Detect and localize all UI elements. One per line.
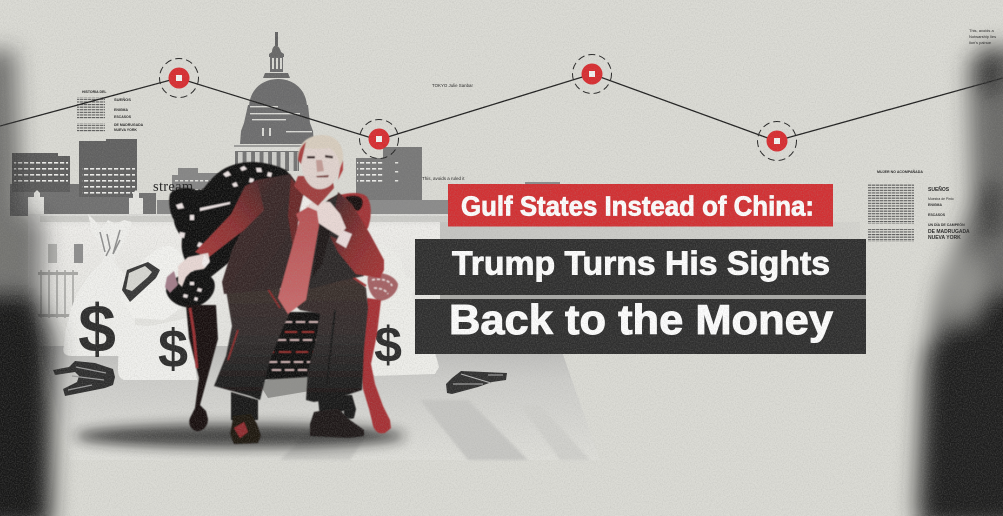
newspaper text column right: UN DÍA DE CAMPEÓN (928, 222, 965, 227)
newspaper text column right: ENIGMA (928, 203, 942, 207)
small caption top right: This, avoids a (969, 28, 994, 33)
title block (415, 184, 866, 354)
right sock and shoe (318, 392, 346, 418)
head (299, 138, 342, 189)
right cuff (336, 230, 352, 248)
left sock and shoe (231, 392, 258, 420)
armchair (166, 162, 398, 433)
dark headline bar one (415, 239, 866, 295)
newspaper text column right (868, 169, 970, 242)
newspaper text column right: ESCASOS (928, 213, 946, 217)
money bag bottom (118, 318, 197, 380)
skyline: city buildings (10, 139, 593, 216)
red headline bar (448, 184, 833, 226)
hair (298, 135, 343, 167)
tie (278, 207, 319, 314)
chair back leg (342, 395, 356, 419)
money bag with cash top (120, 246, 184, 320)
money bag bottom: $ (158, 319, 188, 379)
money bag right (359, 243, 439, 376)
chair apron (258, 312, 324, 380)
white house facade band (28, 190, 866, 346)
chart marker 1 (160, 58, 198, 98)
chart marker 4 (758, 122, 796, 160)
newspaper text column right: NUEVA YORK (928, 235, 961, 241)
newspaper text column left: SUEÑOS (114, 97, 131, 102)
right sleeve (330, 192, 384, 278)
jacket right side (296, 194, 364, 290)
lapel (288, 178, 304, 254)
eyes brows nose mouth (307, 155, 333, 158)
neck (294, 176, 334, 206)
Donald Trump figure (165, 135, 384, 444)
newspaper text column right: SUEÑOS (928, 186, 950, 193)
chair right wing (328, 193, 371, 234)
newspaper text column left: HISTORIA DEL (82, 90, 107, 94)
right trouser (280, 274, 368, 402)
left trouser (214, 278, 290, 400)
small caption top right (969, 28, 996, 45)
left hand (178, 253, 210, 287)
chart line (0, 74, 1003, 141)
floor with shadow (40, 346, 600, 460)
newspaper text column left: NUEVA YORK (114, 128, 137, 132)
cash pile right (446, 371, 507, 394)
dark headline bar one: Trump Turns His Sights (452, 244, 830, 282)
chair right leg (359, 298, 391, 433)
blurred foreground figure left (0, 50, 58, 516)
newspaper text column left: ENIGMA (114, 108, 128, 112)
small caption top right: Notwarship lies (969, 34, 996, 39)
newspaper text column left (77, 90, 144, 132)
small word: stream: stream (153, 179, 194, 195)
blurred foreground figure right (915, 40, 1003, 516)
chair left leg (186, 305, 218, 431)
newspaper text column left: ESCASOS (114, 115, 132, 119)
shirt (289, 186, 320, 286)
money bag left: $ (78, 291, 116, 367)
chair right arm scroll (368, 273, 398, 301)
newspaper text column right: MUJER NO ACOMPAÑADA (877, 169, 923, 174)
US Capitol dome (234, 32, 314, 171)
money bag left (63, 214, 136, 367)
dark headline bar two: Back to the Money (449, 296, 834, 343)
dark headline bar two (415, 296, 866, 354)
newspaper text column right: Muestra de Pinto (928, 197, 954, 201)
cash pile left (53, 361, 115, 396)
seat rail (264, 322, 320, 370)
right hand (306, 201, 346, 236)
newspaper text column left: DE MADRUGADA (114, 123, 144, 127)
small caption: Tokyo: TOKYO Julie Sanbar (432, 83, 473, 88)
chair left arm (166, 271, 215, 307)
chair left wing and crest (169, 162, 302, 284)
chart marker 2 (360, 120, 398, 158)
red headline bar: Gulf States Instead of China: (461, 190, 814, 222)
chair speckles (176, 166, 272, 301)
trousers (214, 274, 368, 402)
money bag right: $ (374, 317, 402, 373)
small caption near title: This, avoids a ruled it (422, 176, 465, 181)
jacket (222, 174, 302, 294)
small caption top right: lion's palnue (969, 40, 992, 45)
cash under chair (258, 376, 318, 398)
chart marker 3 (572, 54, 612, 94)
left sleeve (195, 180, 264, 258)
newspaper text column right: DE MADRUGADA (928, 229, 970, 235)
